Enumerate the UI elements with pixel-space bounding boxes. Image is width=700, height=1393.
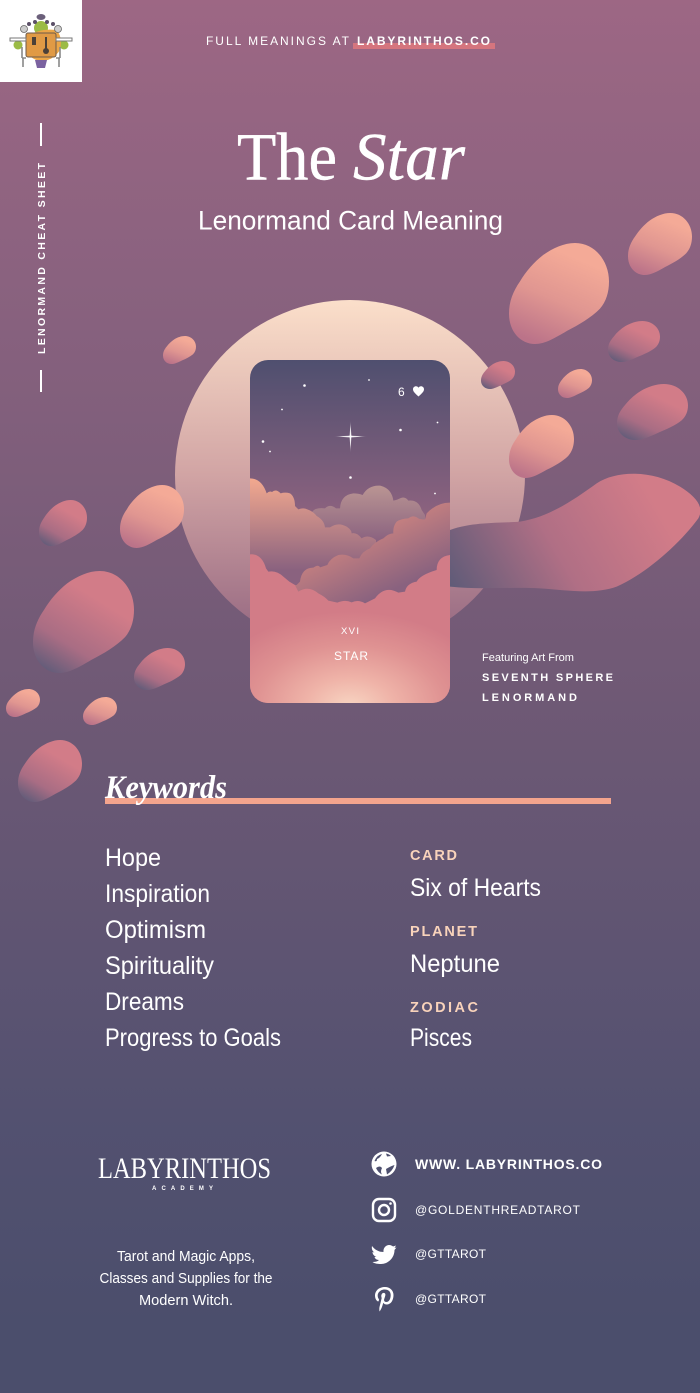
card sky [250,360,450,585]
card number and suit [398,385,424,399]
keyword list: Spirituality [105,952,214,980]
card labels: XVI [341,626,359,637]
icon: instagram [373,1199,395,1221]
icon: globe [372,1152,396,1176]
side label: LENORMAND CHEAT SHEET [36,162,48,354]
keyword list [105,844,281,1052]
card attributes: Six of Hearts [410,874,541,902]
header link [206,34,495,49]
logo badge [0,0,82,82]
card attributes [410,848,541,1052]
pinterest handle: @GTTAROT [415,1292,487,1306]
floating blobs [6,213,692,802]
card labels: STAR [334,649,368,663]
footer tagline: Classes and Supplies for the [100,1270,272,1287]
subtitle: Lenormand Card Meaning [198,206,503,236]
footer tagline [100,1248,272,1309]
tarot card [250,360,450,737]
keyword list: Inspiration [105,880,210,908]
sun circle [175,300,525,650]
card attributes: Pisces [410,1024,472,1052]
card glow [250,624,450,703]
keyword list: Optimism [105,916,206,944]
art credit: SEVENTH SPHERE [482,672,613,684]
card attributes: Neptune [410,950,500,978]
header link: FULL MEANINGS AT [206,34,350,48]
title: The [237,118,337,194]
card attributes: PLANET [410,924,477,940]
footer tagline: Tarot and Magic Apps, [117,1248,255,1265]
card attributes: CARD [410,848,457,864]
keyword list: Progress to Goals [105,1024,281,1052]
art credit [482,652,613,704]
main star [334,420,367,453]
icon: twitter [372,1245,396,1264]
header link: LABYRINTHOS.CO [357,34,490,48]
front cloud [250,554,450,703]
card number and suit: 6 [398,385,405,399]
icon: pinterest [375,1287,394,1312]
footer logo [98,1152,271,1192]
back cloud [312,486,425,532]
title: Star [353,118,466,194]
twitter handle: @GTTAROT [415,1247,487,1261]
footer logo: ACADEMY [152,1186,213,1192]
keyword list: Dreams [105,988,184,1016]
card attributes: ZODIAC [410,1000,479,1016]
art credit: LENORMAND [482,692,577,704]
card labels [334,626,368,663]
left cloud [250,478,376,561]
keyword list: Hope [105,844,161,872]
stars [262,379,438,494]
keywords heading: Keywords [104,770,227,806]
footer tagline: Modern Witch. [139,1292,233,1309]
title [237,118,466,194]
website: WWW. LABYRINTHOS.CO [415,1156,602,1172]
keywords heading [104,770,611,806]
instagram handle: @GOLDENTHREADTAROT [415,1203,581,1217]
wave blob [450,474,700,591]
footer logo: LABYRINTHOS [98,1152,271,1185]
right cloud [295,503,450,603]
art credit: Featuring Art From [482,652,574,664]
